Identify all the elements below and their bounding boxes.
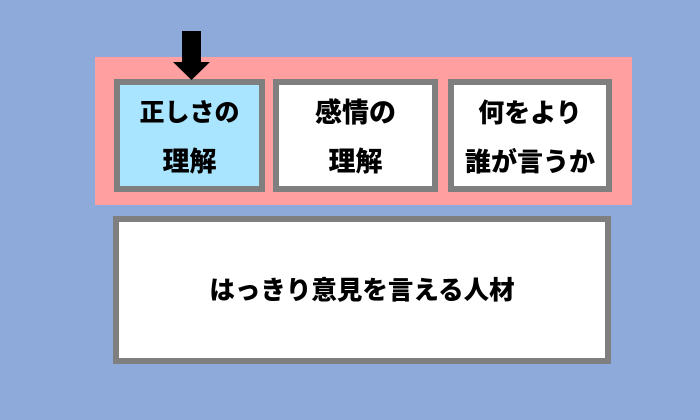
- text: 誰が言うか: 誰が言うか: [465, 147, 595, 177]
- text: はっきり意見を言える人材: はっきり意見を言える人材: [209, 277, 515, 305]
- arrow: pointing down: [173, 31, 210, 80]
- text: 理解: 理解: [162, 147, 216, 177]
- box: 何をより誰が言うか: [448, 79, 612, 192]
- text: 感情の: 感情の: [315, 98, 396, 128]
- text: 理解: 理解: [328, 147, 382, 177]
- panel: pink background: [95, 57, 632, 205]
- box: 正しさの理解: [114, 79, 265, 192]
- box: はっきり意見を言える人材: [113, 216, 611, 364]
- text: 正しさの: 正しさの: [139, 99, 240, 127]
- box: 感情の理解: [273, 79, 438, 192]
- text: 何をより: 何をより: [478, 98, 582, 128]
